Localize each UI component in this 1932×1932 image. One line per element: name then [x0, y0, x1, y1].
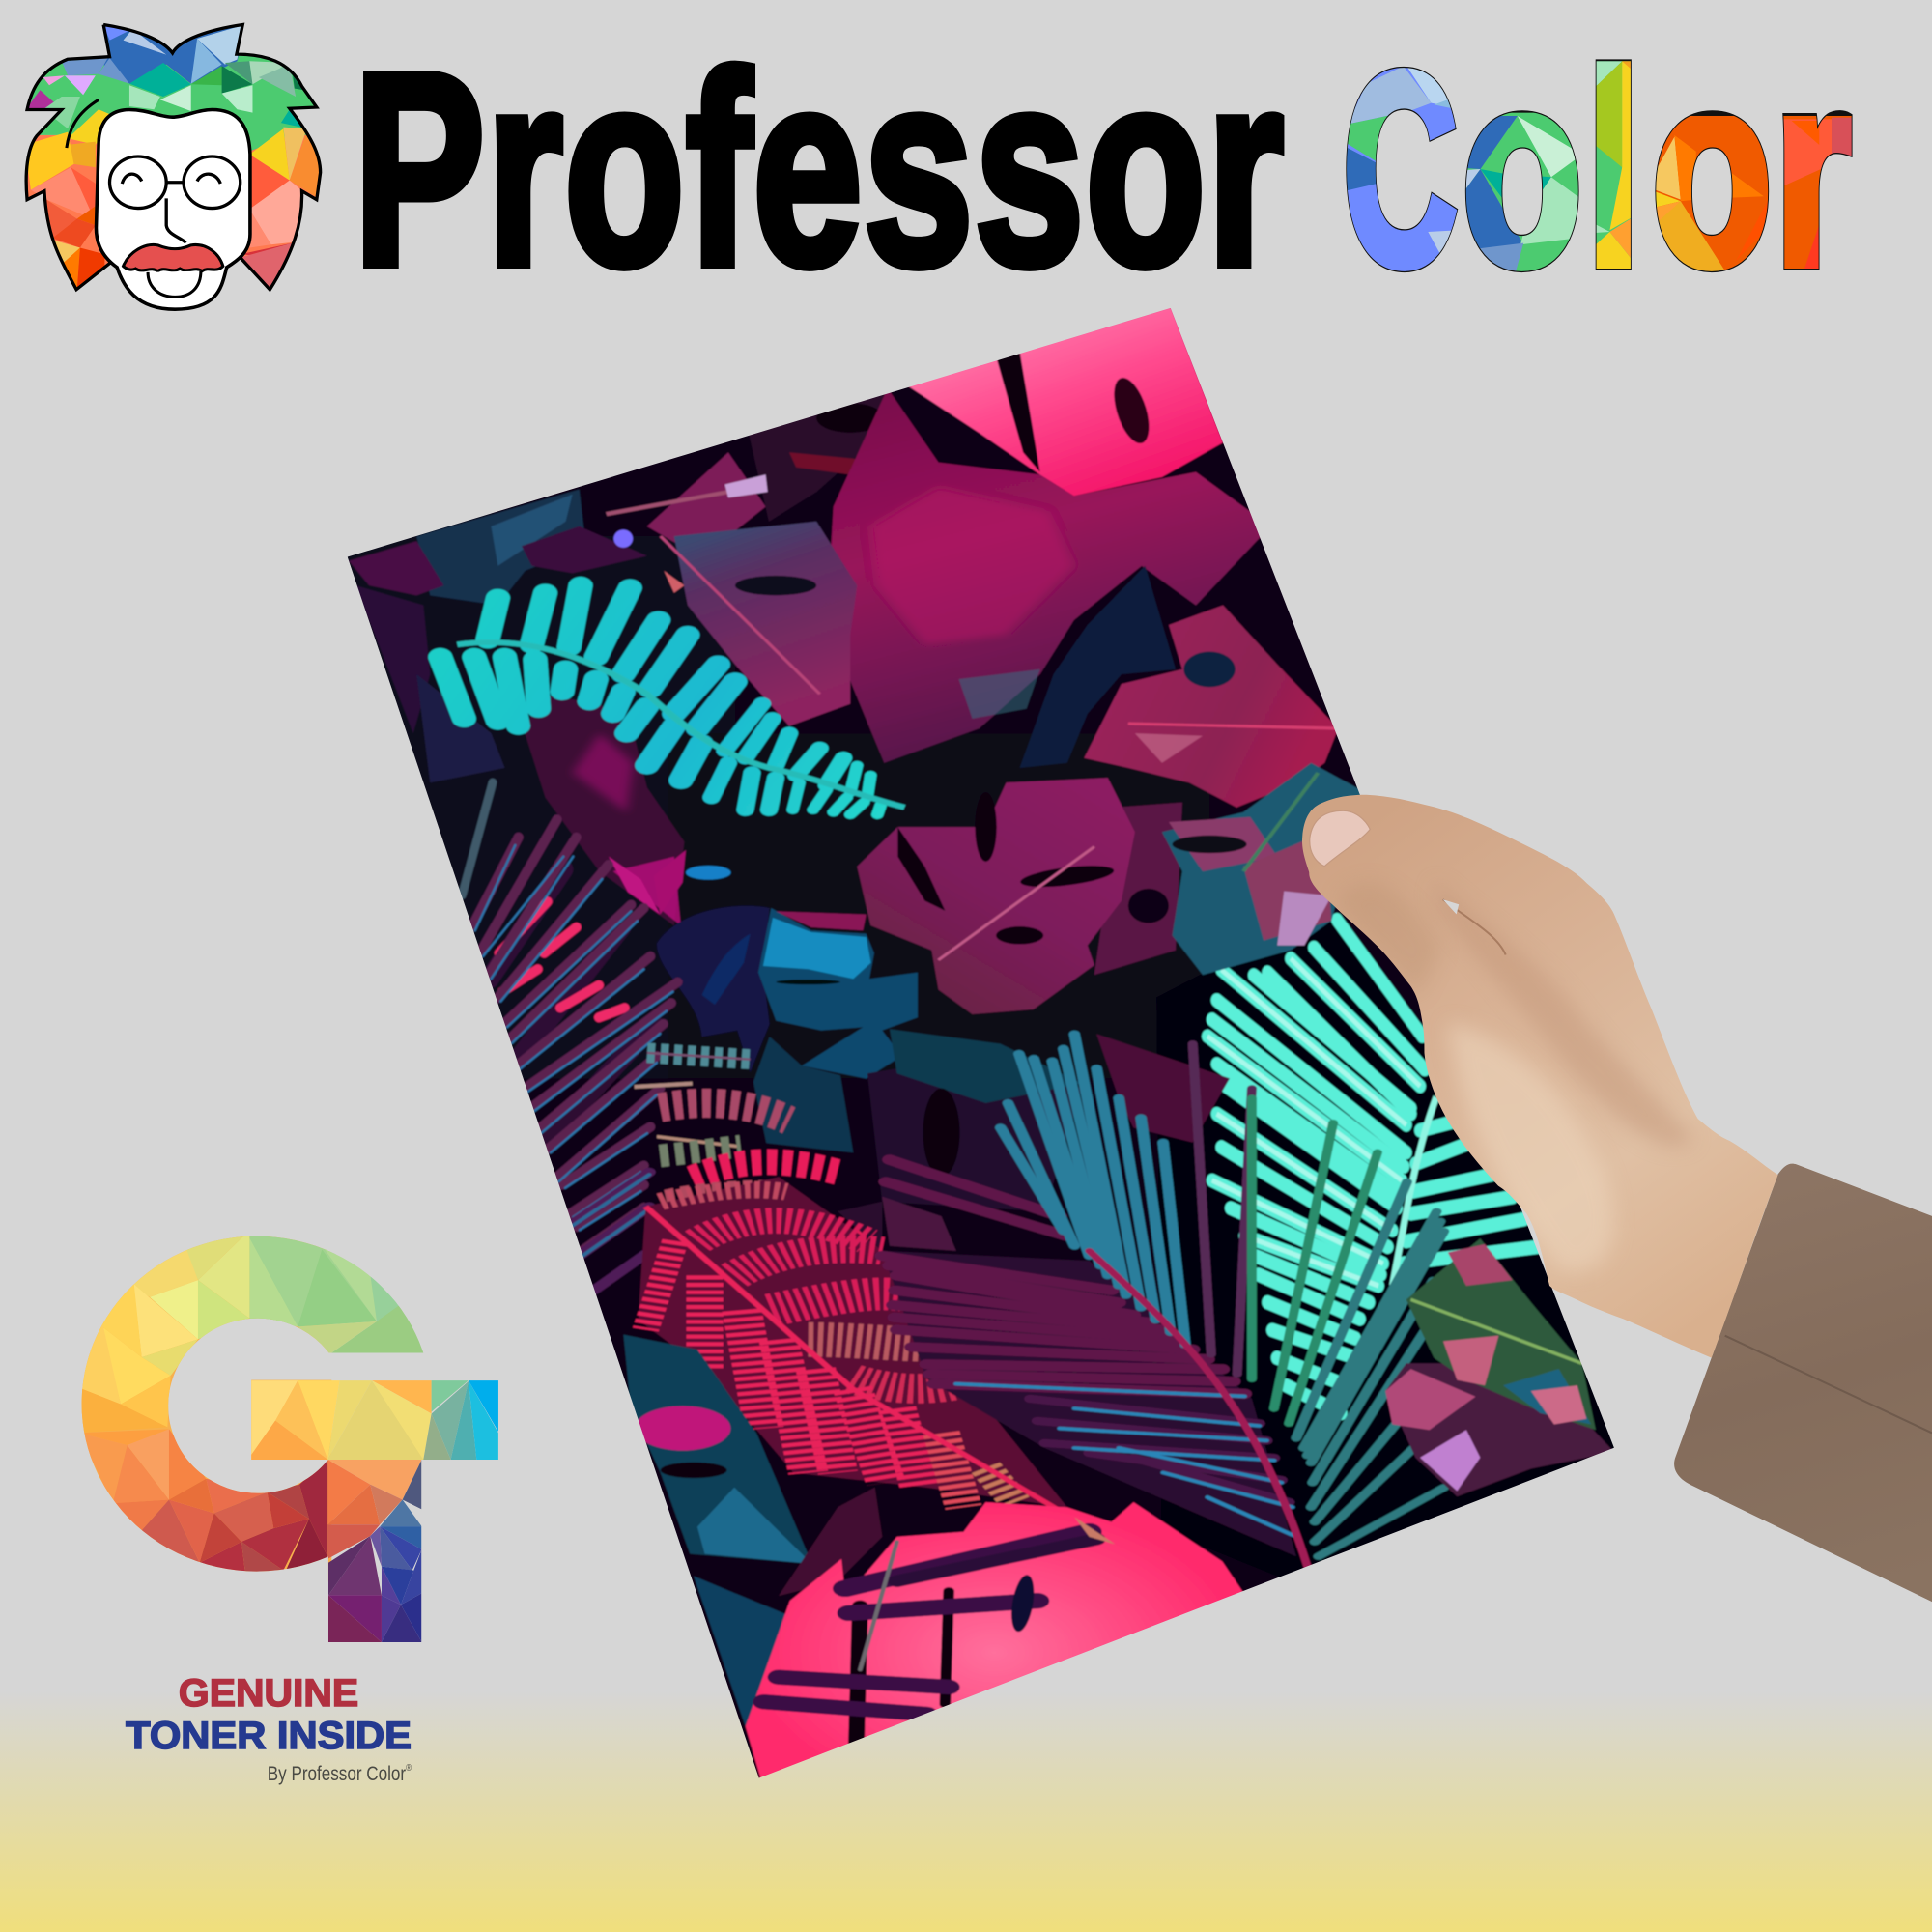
leaf: monstera behind — [1094, 803, 1182, 975]
frond: teal-purple palm — [882, 1251, 1296, 1556]
left lower foliage detail — [462, 782, 918, 1253]
Color outline: C — [1343, 16, 1458, 323]
leaf: blue-purple monstera — [674, 522, 857, 726]
mascot mustache — [124, 244, 223, 271]
leaf: centre monstera — [857, 778, 1135, 1014]
text: By Professor Color: ® — [406, 1763, 412, 1774]
icon: Professor Color mascot logo — [18, 19, 327, 309]
logo: GT low-poly mark — [74, 1231, 499, 1642]
leaf: dark blue-black centre — [1020, 566, 1176, 768]
mascot hair outline — [26, 25, 321, 290]
leaf: right variegated monstera — [1162, 763, 1365, 975]
leaf: upper-left dark blue — [416, 490, 586, 606]
leaf: lower-right variegated — [1385, 1238, 1614, 1496]
strands: lower left purple fronds — [568, 1172, 665, 1291]
mascot hair low-poly — [27, 25, 319, 288]
text: GENUINE: GENUINE — [179, 1672, 358, 1715]
leaf: right pink monstera — [1084, 606, 1338, 808]
blades: left purple fronds — [462, 782, 678, 1253]
mascot face — [96, 110, 250, 309]
sleeve: brown cuff — [1674, 1164, 1932, 1602]
title: Color low-poly lettering — [1346, 59, 1853, 272]
leaf: big magenta centre — [830, 388, 1270, 763]
Color polygon fill — [1347, 61, 1852, 271]
hand and thumb — [1302, 795, 1778, 1358]
fern: cyan — [440, 585, 881, 814]
mascot glasses — [110, 156, 241, 242]
fern: red — [639, 1177, 1104, 1537]
leaf: pink monstera top — [908, 307, 1223, 496]
title: Professor: Professor — [354, 17, 1285, 323]
mascot mouth — [148, 271, 201, 297]
frond: cyan palm — [1156, 909, 1624, 1585]
caption: Genuine Toner Inside — [126, 1672, 412, 1785]
text: By Professor Color: By Professor Color — [268, 1761, 443, 1785]
leaf: bottom pink monstera — [746, 1502, 1243, 1803]
lower foliage group — [568, 1029, 1444, 1803]
fern: small teal and pink sprays — [635, 1053, 860, 1246]
leaf: blue monstera — [758, 908, 918, 1079]
leaf: dark magenta left — [525, 694, 684, 925]
thumb nail — [1310, 810, 1370, 867]
hand holding sheet — [1302, 795, 1932, 1602]
hand shading — [1337, 881, 1694, 1271]
leaf: bottom-left blue — [694, 1577, 801, 1726]
Color outline: olor — [1462, 17, 1851, 323]
leaf: navy — [657, 906, 770, 1072]
printed sheet: tropical foliage artwork — [348, 308, 1614, 1777]
text: TONER INSIDE: TONER INSIDE — [126, 1715, 412, 1757]
upper foliage group — [328, 307, 1338, 1078]
leaf: blue sheen — [686, 866, 731, 880]
finger gap — [1443, 899, 1459, 914]
leaf: lower-left teal — [623, 1335, 812, 1564]
